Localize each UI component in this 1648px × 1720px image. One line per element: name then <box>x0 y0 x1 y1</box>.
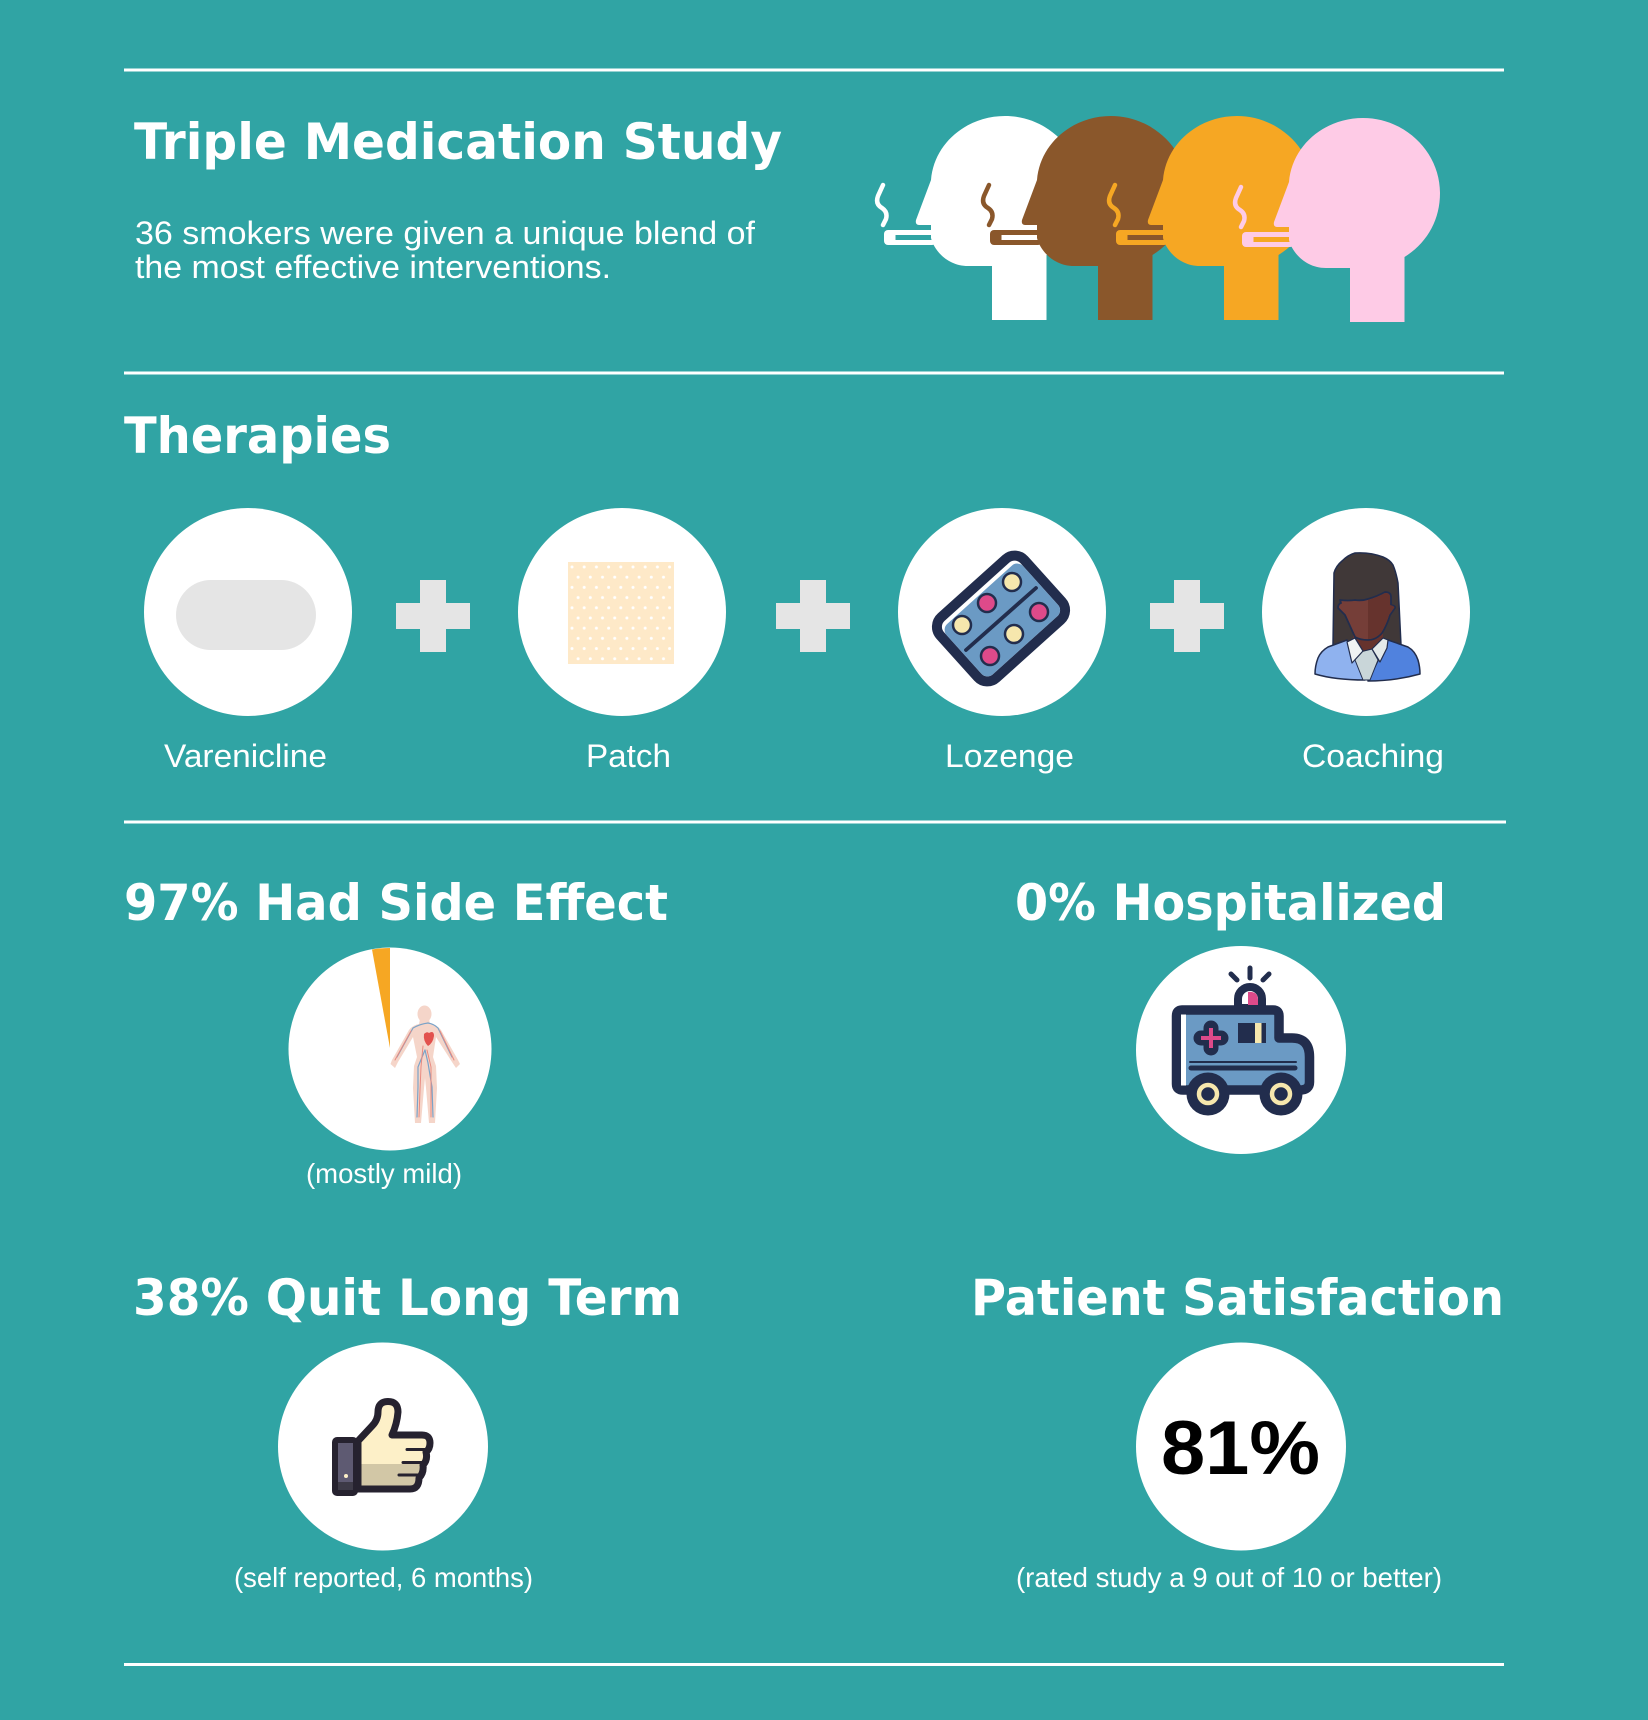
head: orange <box>1109 116 1314 320</box>
icon: pill <box>176 580 316 650</box>
therapy: coaching <box>1262 508 1470 774</box>
heading: quit long term: 38% Quit Long Term <box>133 1269 682 1327</box>
icon: ambulance <box>1176 968 1310 1116</box>
icon: thumbs up <box>332 1402 430 1496</box>
heading: patient satisfaction: Patient Satisfaction <box>971 1269 1504 1327</box>
study description: the most effective interventions. <box>135 249 611 285</box>
icon: circulatory body <box>390 1006 460 1123</box>
label: patch: Patch <box>586 738 671 774</box>
pie chart: 97 percent <box>288 948 492 1150</box>
label: varenicline: Varenicline <box>164 738 327 774</box>
plus sign 3 <box>1150 580 1224 652</box>
heading: side effect: 97% Had Side Effect <box>124 874 668 932</box>
caption: rated study: (rated study a 9 out of 10 or better) <box>1016 1562 1442 1593</box>
panel: hospitalized <box>1015 874 1446 1154</box>
caption: mostly mild: (mostly mild) <box>306 1158 462 1189</box>
study description <box>135 215 755 285</box>
plus sign 2 <box>776 580 850 652</box>
circle: thumb background <box>278 1342 488 1550</box>
study description: 36 smokers were given a unique blend of <box>135 215 755 251</box>
panel: quit long term <box>133 1269 682 1593</box>
caption: self reported: (self reported, 6 months) <box>234 1562 533 1593</box>
head: brown <box>983 116 1188 320</box>
head: white <box>877 116 1082 320</box>
icon: coach <box>1315 553 1420 681</box>
heading: hospitalized: 0% Hospitalized <box>1015 874 1446 932</box>
therapy: patch <box>518 508 726 774</box>
panel: patient satisfaction <box>971 1269 1504 1593</box>
title: Triple Medication Study <box>134 113 782 171</box>
head: pink <box>1235 118 1440 322</box>
label: lozenge: Lozenge <box>945 738 1074 774</box>
heading: therapies: Therapies <box>124 407 391 465</box>
icon: blister pack <box>932 550 1070 687</box>
panel: side effects <box>124 874 668 1189</box>
therapy: lozenge <box>898 508 1106 774</box>
icon: nicotine patch <box>568 562 674 664</box>
icon: four smoking heads <box>877 116 1440 322</box>
therapy: varenicline <box>144 508 352 774</box>
circle: ambulance background <box>1136 946 1346 1154</box>
plus sign 1 <box>396 580 470 652</box>
circle: satisfaction background <box>1136 1342 1346 1550</box>
label: coaching: Coaching <box>1302 738 1444 774</box>
stat: 81 percent: 81% <box>1161 1406 1320 1491</box>
